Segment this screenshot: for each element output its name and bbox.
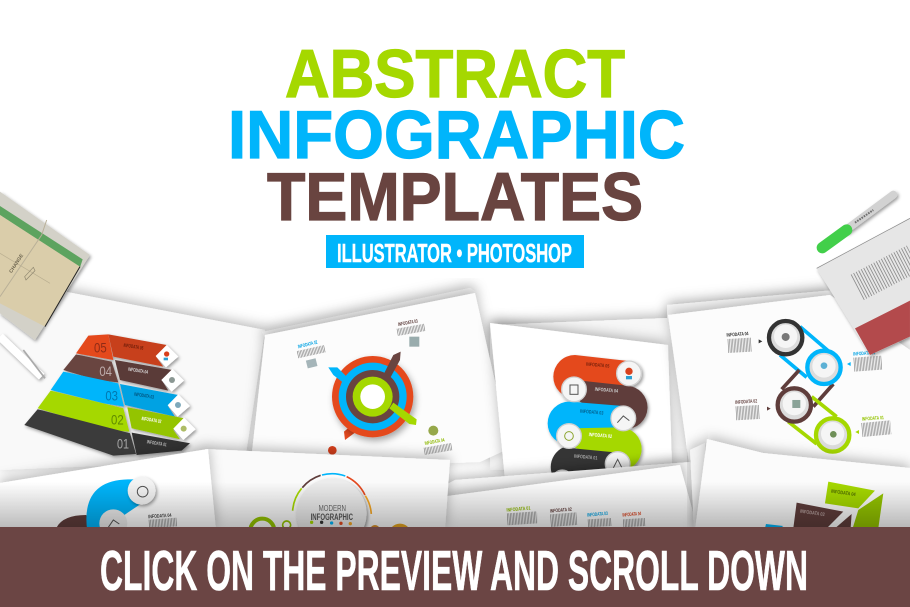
- orange pointer: [344, 427, 355, 440]
- target labels: INFODATA 02: [297, 340, 318, 350]
- marker pen: [822, 195, 893, 248]
- bars labels: INFODATA 04: [622, 511, 642, 519]
- pill labels: INFODATA 04: [594, 387, 618, 395]
- step labels: INFODATA 05: [123, 343, 144, 352]
- notebook: CHANGE: [8, 252, 25, 274]
- title line: templates: TEMPLATES: [267, 159, 643, 235]
- notebook: [0, 192, 90, 340]
- step labels: INFODATA 02: [141, 416, 162, 425]
- brown pointer: [383, 352, 401, 378]
- step labels: [123, 343, 167, 448]
- circle chart: MODERN: [319, 504, 346, 513]
- blue pointer: [328, 367, 350, 383]
- title: [228, 36, 685, 235]
- wedge chart: INFODATA 03: [800, 509, 825, 518]
- green pointer: [389, 403, 417, 425]
- ring nodes: [769, 321, 849, 452]
- ring labels: INFODATA 04: [726, 331, 749, 339]
- bottom shading: [0, 482, 910, 528]
- panel: blue curve sheet: [0, 449, 216, 537]
- blue link: [780, 327, 835, 377]
- panel: modern infographic sheet: [205, 449, 450, 548]
- target labels: INFODATA 03: [398, 319, 418, 328]
- panel: wedge sheet: [690, 439, 910, 530]
- panel: target sheet: [250, 288, 510, 470]
- panel: pills sheet: [490, 323, 672, 490]
- pill labels: INFODATA 05: [586, 362, 610, 370]
- ring labels: [726, 331, 891, 434]
- step numbers: 02: [111, 411, 124, 427]
- step numbers: [94, 339, 129, 452]
- title line: abstract: ABSTRACT: [285, 36, 625, 112]
- brown link: [782, 370, 833, 407]
- curve chart: INFODATA 04: [148, 513, 172, 520]
- circle chart: [250, 474, 411, 548]
- pill labels: INFODATA 02: [588, 432, 612, 440]
- pills chart: [548, 355, 647, 490]
- ring labels: INFODATA 02: [735, 398, 758, 406]
- step numbers: 01: [117, 436, 129, 452]
- pen: [0, 337, 45, 378]
- panel: pyramid sheet: [0, 275, 265, 470]
- panel: rings sheet: [668, 295, 910, 490]
- pill labels: INFODATA 01: [574, 454, 598, 462]
- step labels: INFODATA 01: [146, 439, 167, 448]
- bars labels: INFODATA 01: [506, 506, 531, 514]
- ring labels: INFODATA 03: [853, 350, 876, 358]
- subtitle badge: [326, 235, 584, 268]
- subtitle badge: ILLUSTRATOR • PHOTOSHOP: [337, 238, 572, 268]
- step numbers: 04: [99, 363, 112, 379]
- step numbers: 03: [105, 388, 118, 404]
- book: [817, 218, 910, 355]
- target labels: [297, 319, 452, 455]
- green link: [788, 397, 837, 444]
- wedge chart: [765, 482, 883, 528]
- back sheets: stack behind right panel: [490, 290, 860, 480]
- diamond icons: [156, 345, 196, 440]
- bars labels: INFODATA 02: [550, 507, 572, 515]
- pyramid chart: [24, 334, 196, 456]
- wedge chart: INFODATA 04: [831, 489, 856, 498]
- bars labels: INFODATA 03: [587, 511, 608, 519]
- pill labels: [574, 362, 618, 462]
- pill icons: [552, 361, 641, 490]
- title line: infographic: INFOGRAPHIC: [228, 97, 685, 173]
- pill labels: INFODATA 03: [580, 409, 604, 417]
- target labels: INFODATA 04: [424, 438, 445, 447]
- bars labels: [506, 506, 645, 523]
- target chart: [328, 352, 417, 440]
- curve chart: [57, 477, 177, 537]
- rings chart: [726, 321, 891, 452]
- panel: bars sheet: [440, 462, 700, 530]
- circle chart: INFOGRAPHIC: [311, 512, 353, 522]
- step labels: INFODATA 04: [128, 367, 148, 376]
- step labels: INFODATA 03: [134, 392, 154, 401]
- ring labels: INFODATA 01: [862, 415, 884, 423]
- step numbers: 05: [94, 339, 107, 355]
